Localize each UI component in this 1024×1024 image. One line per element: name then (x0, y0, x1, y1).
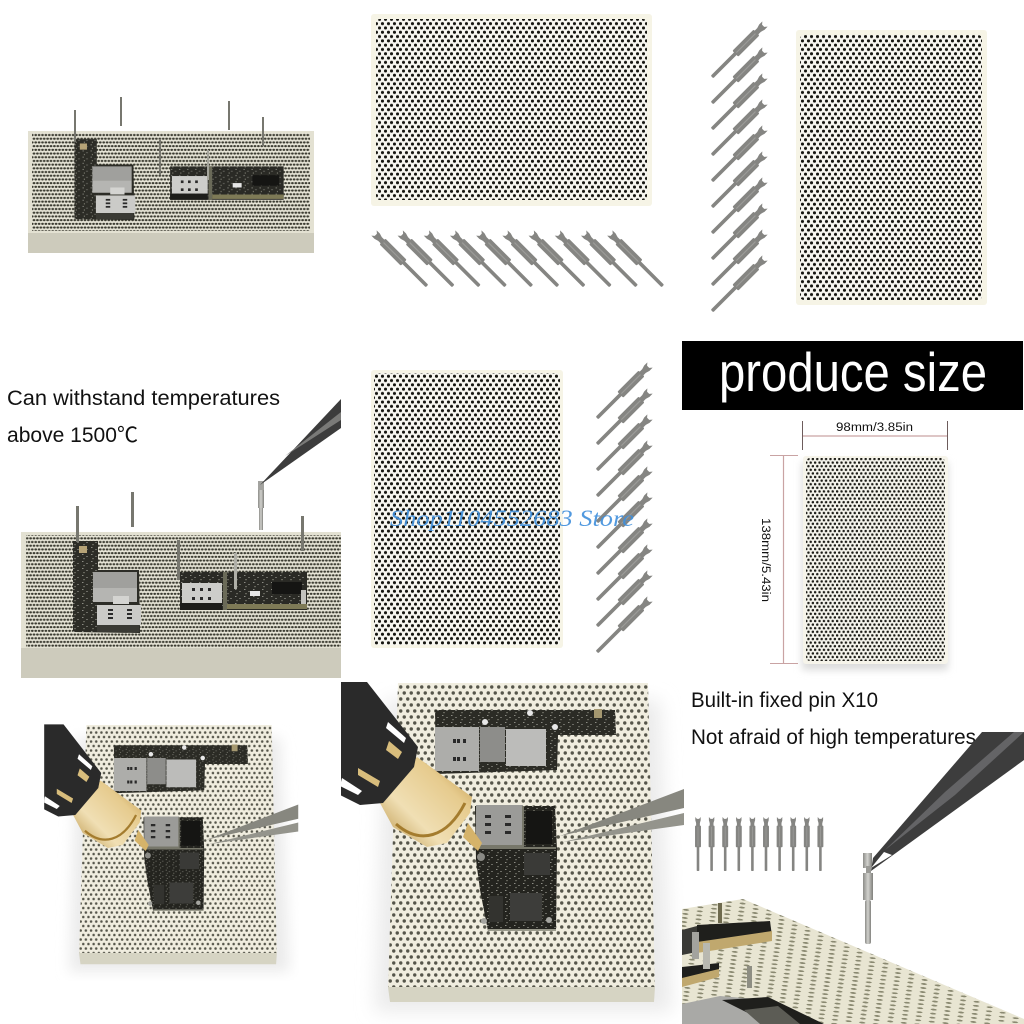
board shadow (375, 700, 672, 1012)
heading: temperature claim: above 1500℃ (7, 424, 138, 447)
lower phone PCB (475, 805, 557, 931)
heading: pin claim (691, 689, 976, 749)
width dimension (802, 421, 948, 450)
heading: pin claim: Built-in fixed pin X10 (691, 689, 878, 712)
height dimension: 138mm/5.43in (759, 518, 771, 602)
tweezers (260, 399, 341, 485)
honeycomb plate, portrait (796, 30, 987, 305)
ten pins in a column (594, 362, 653, 655)
panel: heat gun on board, small view (43, 724, 298, 972)
phone PCBs on board (73, 541, 307, 633)
board top face (28, 131, 314, 233)
plate shadow (802, 462, 948, 670)
board front edge (28, 233, 314, 253)
board edge (388, 987, 655, 1002)
heading: temperature claim (7, 387, 280, 447)
height dimension (759, 456, 798, 664)
panel: honeycomb plate with ten pins below (371, 14, 666, 289)
fixed pins (76, 492, 306, 604)
tweezers (560, 789, 684, 842)
panel: portrait plate with ten pins at left (709, 21, 987, 314)
panel: product size (682, 341, 1023, 670)
plate with dimensions (803, 456, 948, 664)
panel: temperature resistance (7, 387, 341, 678)
row of ten pins (695, 817, 823, 871)
board front edge (21, 648, 341, 678)
heat gun black body (340, 682, 418, 805)
ten pins in a row (371, 230, 666, 289)
panel: side view of board with phone PCBs (28, 97, 314, 253)
upper phone PCB (435, 709, 616, 774)
board hole grid (32, 133, 310, 231)
heat gun brass barrel (380, 757, 482, 851)
PCBs on board (682, 903, 824, 1024)
ten pins in a column (709, 21, 768, 314)
board in perspective (682, 899, 1024, 1024)
width dimension: 98mm/3.85in (836, 422, 913, 434)
panel: centre plate with pins and watermark (371, 362, 653, 655)
panel: heat gun on board, large view (340, 682, 684, 1012)
heading: pin claim: Not afraid of high temperatures (691, 726, 976, 749)
heading: temperature claim: Can withstand temperatures (7, 387, 280, 410)
fixed pins standing on board (74, 97, 264, 180)
board top face with holes (21, 532, 341, 648)
large pin held by tweezers (863, 853, 873, 944)
title banner: produce size (719, 341, 987, 403)
watermark: Shop1104552683 Store (390, 506, 634, 532)
tweezers (871, 732, 1024, 871)
honeycomb plate, portrait (371, 370, 563, 648)
phone PCBs on board (74, 139, 284, 220)
board top with holes (388, 683, 655, 987)
pin held by tweezers (258, 481, 264, 530)
honeycomb plate, landscape (371, 14, 652, 206)
panel: built-in fixed pins (682, 689, 1024, 1024)
